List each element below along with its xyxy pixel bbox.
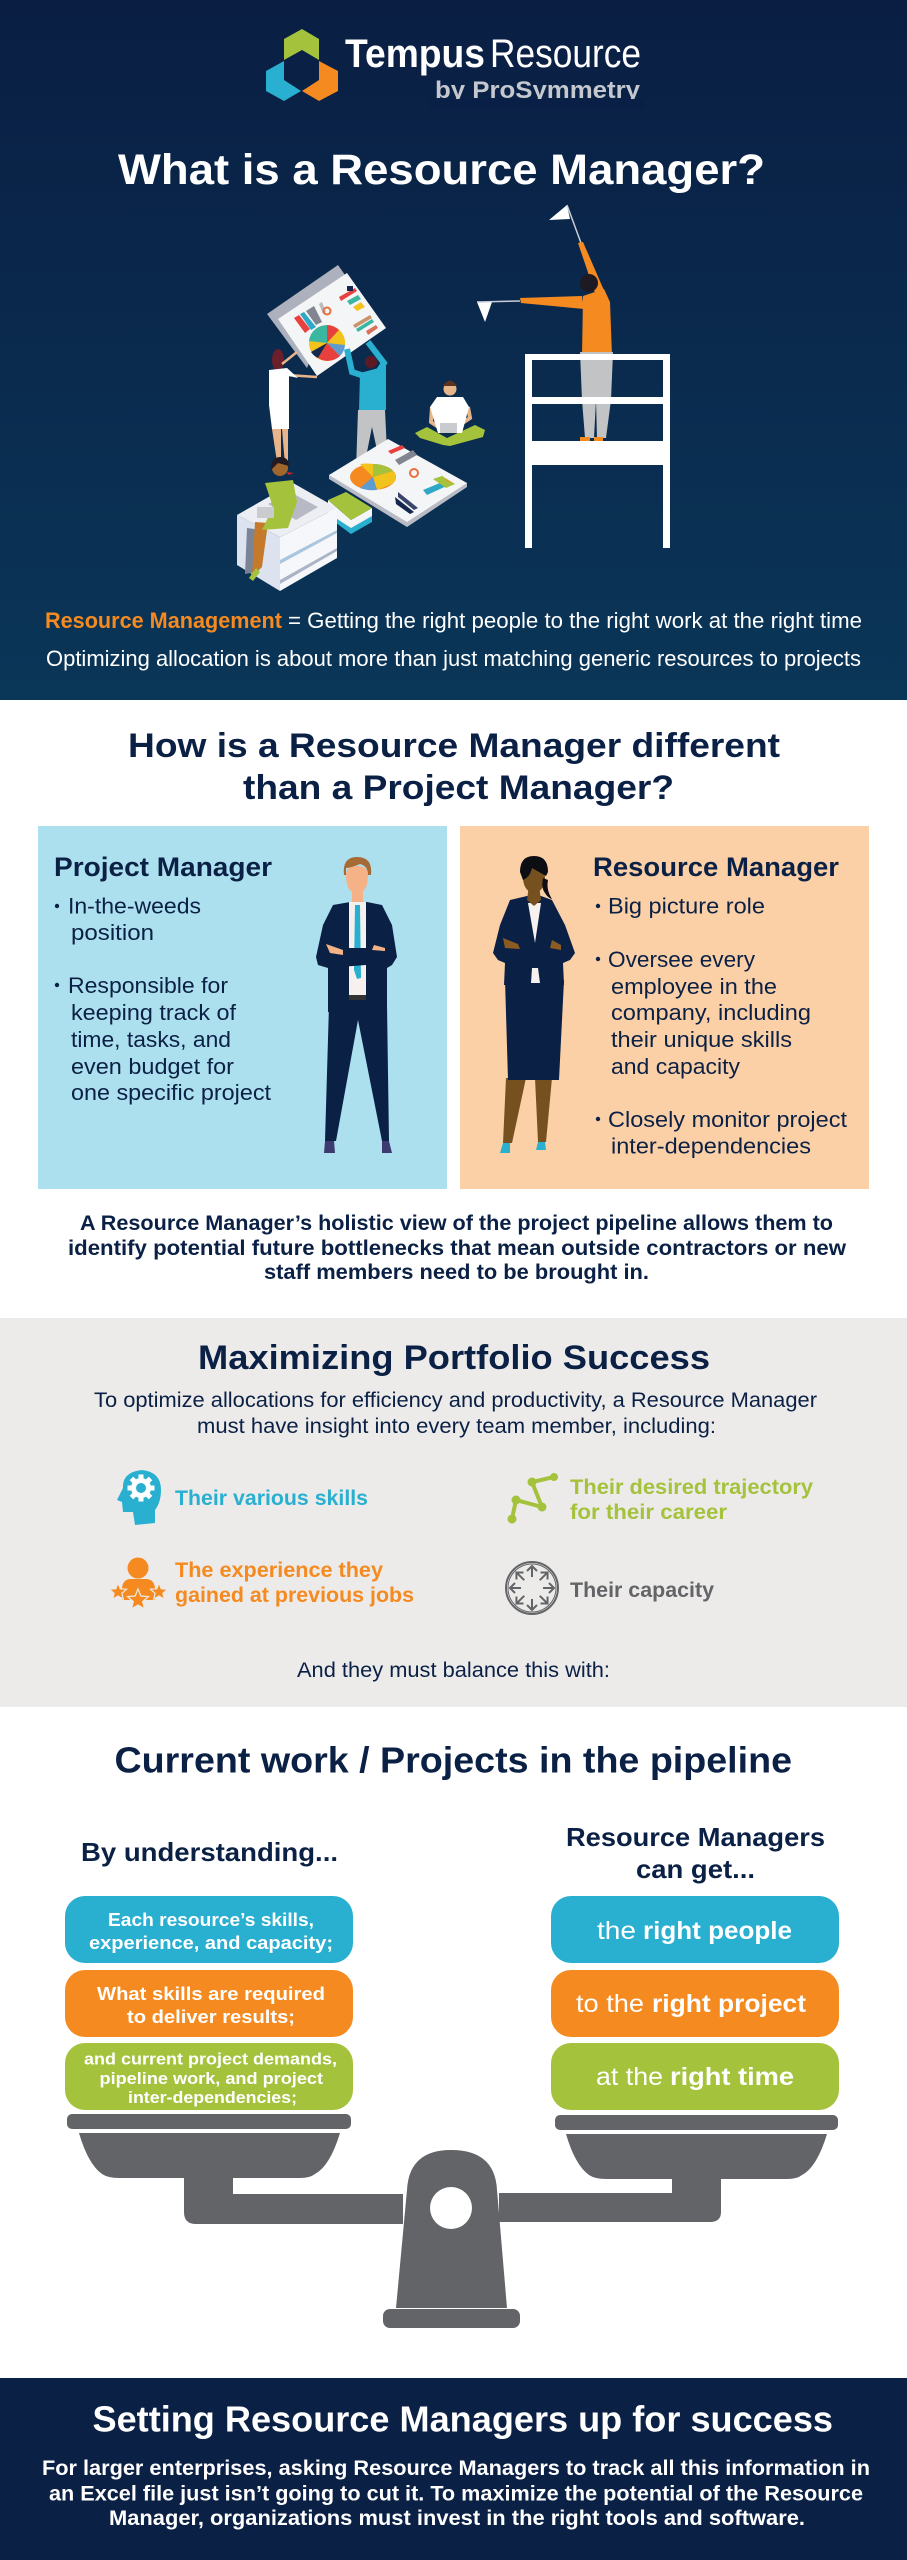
woman in suit bbox=[493, 856, 575, 1153]
heading: Maximizing Portfolio Success bbox=[198, 1339, 710, 1377]
holistic view paragraph: identify potential future bottlenecks that mean outside contractors or new bbox=[68, 1236, 846, 1260]
woman in white dress bbox=[269, 349, 317, 465]
icon: trajectory path bbox=[508, 1473, 558, 1524]
definition text: Optimizing allocation is about more than just matching generic resources to projects bbox=[46, 646, 861, 671]
right column heading: Resource Managers bbox=[566, 1822, 825, 1852]
footer paragraph: For larger enterprises, asking Resource Managers to track all this information in bbox=[42, 2457, 870, 2480]
right column heading bbox=[566, 1822, 825, 1884]
right pill: right people bbox=[551, 1896, 839, 1963]
icon: capacity circle with arrows bbox=[506, 1562, 558, 1614]
man in suit bbox=[316, 857, 397, 1153]
lower chart document bbox=[329, 439, 467, 527]
balance scale bbox=[67, 2114, 838, 2328]
left pill: project demands: and current project demands, bbox=[84, 2050, 337, 2068]
skills label: Their various skills bbox=[175, 1486, 368, 1510]
project manager bullets: Responsible for bbox=[68, 973, 228, 998]
left pill: project demands: pipeline work, and project bbox=[100, 2069, 323, 2088]
trajectory label: for their career bbox=[570, 1500, 728, 1524]
definition text bbox=[45, 608, 862, 671]
illustration: team with charts and scaffold bbox=[237, 205, 670, 591]
holistic view paragraph: A Resource Manager’s holistic view of the project pipeline allows them to bbox=[80, 1211, 833, 1235]
left pill: project demands bbox=[65, 2043, 353, 2110]
project manager heading: Project Manager bbox=[54, 852, 273, 882]
logo mark bbox=[266, 29, 338, 101]
logo wordmark: Resource bbox=[490, 32, 641, 76]
experience label: The experience they bbox=[175, 1558, 383, 1582]
intro text bbox=[94, 1389, 817, 1438]
project manager bullets: time, tasks, and bbox=[71, 1027, 231, 1052]
woman in green with laptop bbox=[245, 457, 297, 581]
right pill: right time: at the bbox=[596, 2063, 663, 2091]
left pill: skills: experience, and capacity; bbox=[89, 1933, 333, 1953]
project manager bullets: keeping track of bbox=[71, 1000, 237, 1025]
left pill: required skills bbox=[65, 1970, 353, 2037]
right pill: right people: the bbox=[597, 1917, 636, 1945]
fulcrum bbox=[396, 2150, 507, 2308]
section heading: how different bbox=[128, 727, 780, 807]
left pill: required skills: to deliver results; bbox=[127, 2007, 295, 2027]
project manager bullets: In-the-weeds bbox=[68, 894, 201, 918]
resource manager bullets bbox=[596, 894, 847, 1158]
capacity label: Their capacity bbox=[570, 1578, 714, 1602]
project manager bullets: position bbox=[71, 920, 154, 945]
section heading: how different: How is a Resource Manager different bbox=[128, 727, 780, 765]
right plate bbox=[499, 2115, 838, 2222]
heading: current work: Current work / Projects in the pipeline bbox=[114, 1740, 792, 1780]
section heading: how different: than a Project Manager? bbox=[243, 769, 674, 807]
resource manager bullets: company, including bbox=[611, 1000, 811, 1025]
scaffold with orange figure bbox=[477, 205, 670, 548]
resource manager bullets: and capacity bbox=[611, 1054, 740, 1079]
project manager bullets: even budget for bbox=[71, 1054, 234, 1079]
hero panel bbox=[0, 0, 907, 700]
logo wordmark: by ProSymmetry bbox=[435, 77, 641, 104]
raised chart board bbox=[267, 265, 386, 376]
footer paragraph: Manager, organizations must invest in the right tools and software. bbox=[109, 2507, 805, 2530]
trajectory label: Their desired trajectory bbox=[570, 1475, 813, 1499]
man sitting with tablet bbox=[415, 380, 485, 446]
project manager bullets: one specific project bbox=[71, 1080, 271, 1105]
stacked books bbox=[328, 492, 372, 534]
footer heading: Setting Resource Managers up for success bbox=[92, 2398, 833, 2440]
intro text: must have insight into every team member, including: bbox=[197, 1415, 716, 1438]
icon: head with gear bbox=[117, 1470, 161, 1525]
left plate bbox=[67, 2114, 403, 2224]
resource manager bullets: their unique skills bbox=[611, 1027, 792, 1052]
title: What is a Resource Manager? bbox=[118, 146, 765, 194]
panel: setting resource managers up for success bbox=[0, 2378, 907, 2560]
intro text: To optimize allocations for efficiency and productivity, a Resource Manager bbox=[94, 1389, 817, 1412]
left pill: project demands: inter-dependencies; bbox=[128, 2088, 297, 2107]
logo wordmark: Tempus bbox=[345, 32, 485, 76]
trajectory label bbox=[570, 1475, 813, 1524]
panel: project manager bbox=[38, 826, 447, 1189]
resource manager bullets: employee in the bbox=[611, 974, 777, 999]
right pill: right project bbox=[551, 1970, 839, 2037]
footer paragraph bbox=[42, 2457, 870, 2530]
holistic view paragraph bbox=[68, 1211, 846, 1284]
resource manager heading: Resource Manager bbox=[593, 852, 839, 882]
base bbox=[383, 2309, 520, 2328]
right pill: right people: right people bbox=[643, 1917, 792, 1945]
resource manager bullets: inter-dependencies bbox=[611, 1134, 811, 1158]
left pill: skills: Each resource’s skills, bbox=[108, 1910, 314, 1930]
holistic view paragraph: staff members need to be brought in. bbox=[264, 1260, 649, 1284]
resource manager bullets: Closely monitor project bbox=[608, 1107, 847, 1132]
definition text: = Getting the right people to the right work at the right time bbox=[288, 608, 862, 633]
right column heading: can get... bbox=[636, 1854, 755, 1884]
right pill: right time: right time bbox=[670, 2063, 794, 2091]
man in blue sweater bbox=[347, 342, 388, 473]
right pill: right time bbox=[551, 2043, 839, 2110]
experience label: gained at previous jobs bbox=[175, 1583, 414, 1607]
left pill: required skills: What skills are required bbox=[97, 1984, 325, 2004]
definition text: Resource Management bbox=[45, 608, 283, 633]
left pill: skills bbox=[65, 1896, 353, 1963]
right pill: right project: to the bbox=[576, 1990, 644, 2018]
logo wordmark bbox=[345, 32, 645, 109]
resource manager bullets: Oversee every bbox=[608, 947, 755, 972]
panel: resource manager bbox=[460, 826, 869, 1189]
project manager bullets bbox=[55, 894, 271, 1105]
panel: maximizing portfolio success bbox=[0, 1318, 907, 1707]
icon: person with stars bbox=[109, 1558, 168, 1609]
right pill: right project: right project bbox=[652, 1990, 807, 2018]
balance lead-in: And they must balance this with: bbox=[297, 1659, 610, 1682]
paper stack bbox=[237, 483, 337, 591]
resource manager bullets: Big picture role bbox=[608, 894, 765, 918]
experience label bbox=[175, 1558, 414, 1607]
logo bbox=[266, 29, 645, 109]
left column heading: By understanding... bbox=[81, 1837, 338, 1867]
footer paragraph: an Excel file just isn’t going to cut it. To maximize the potential of the Resource bbox=[49, 2482, 863, 2506]
